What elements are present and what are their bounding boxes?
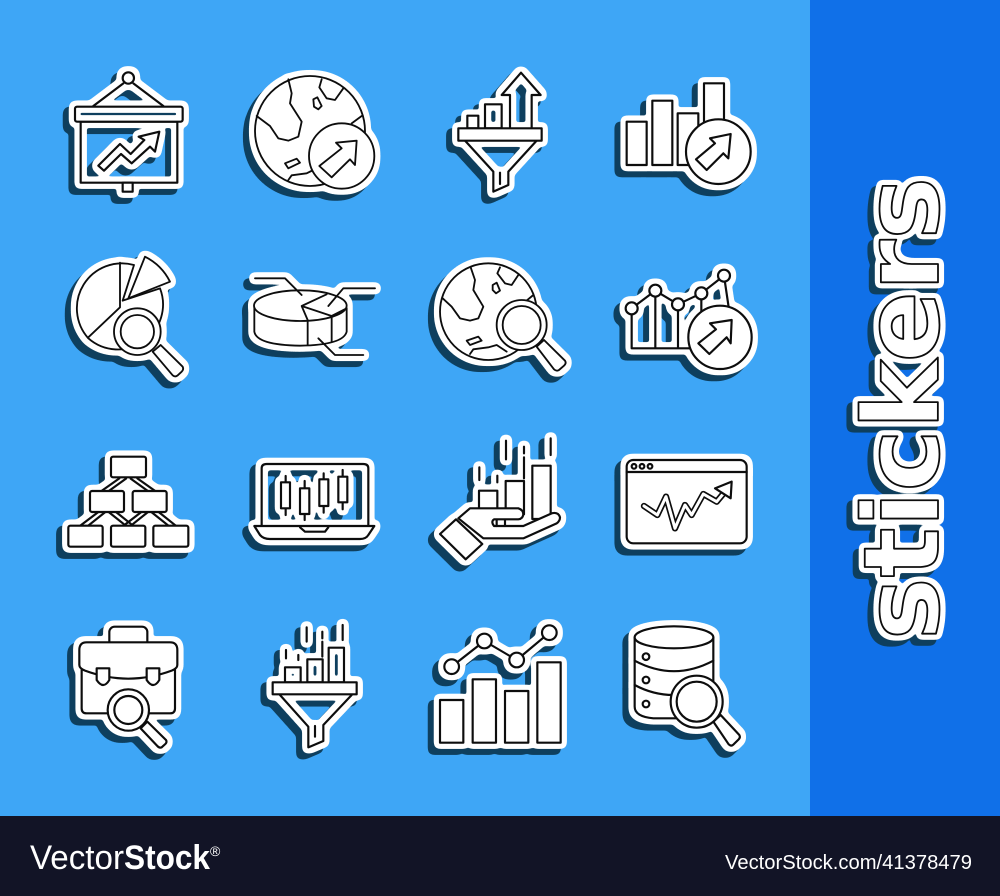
candlesticks <box>286 470 343 520</box>
bars <box>440 700 463 743</box>
footer logo: VectorStock: ® <box>210 843 221 859</box>
footer logo: VectorStock: Vector <box>30 839 124 877</box>
icon: funnel with candles and bars <box>273 625 357 747</box>
icon: database with magnifier <box>635 626 740 746</box>
magnifier <box>153 345 183 376</box>
icon: hierarchy diagram <box>68 457 188 547</box>
vertical title: stickers: stickers <box>841 177 963 640</box>
icon: bar chart with trend line <box>440 625 561 743</box>
icon: hand holding bar chart <box>440 438 560 559</box>
right side panel <box>810 0 1000 816</box>
zigzag arrow <box>98 132 159 171</box>
icon: presentation board with rising arrow <box>75 72 183 192</box>
icon: browser window with line graph <box>627 460 747 543</box>
graph line <box>644 492 725 528</box>
footer image id: VectorStock.com/41378479 <box>725 852 972 874</box>
icon: globe with magnifier <box>440 263 566 371</box>
clasps <box>97 668 109 685</box>
footer bar <box>0 816 1000 896</box>
sleeve <box>440 519 482 559</box>
magnifier <box>713 715 740 746</box>
icon: funnel with bars and up arrow <box>458 73 542 192</box>
icon: line chart with arrow badge <box>626 270 752 369</box>
magnifier <box>141 722 167 748</box>
board hanger <box>93 83 163 106</box>
arrow badge <box>686 119 751 184</box>
leader lines <box>255 278 375 355</box>
icon: laptop with candlestick chart <box>254 464 374 539</box>
icon: globe with arrow badge <box>255 76 374 189</box>
arrow badge <box>309 123 374 189</box>
up arrow <box>502 73 541 128</box>
footer logo: VectorStock <box>30 839 221 877</box>
icon: pie chart with magnifier <box>77 257 183 376</box>
hand <box>458 508 560 538</box>
icon: 3D pie chart with leader lines <box>254 278 375 355</box>
footer logo: VectorStock: Stock <box>124 839 210 877</box>
icon: bar chart with arrow badge <box>627 83 751 184</box>
arrow badge <box>688 306 752 369</box>
icon: briefcase with magnifier <box>79 627 177 748</box>
magnifier <box>537 340 566 371</box>
